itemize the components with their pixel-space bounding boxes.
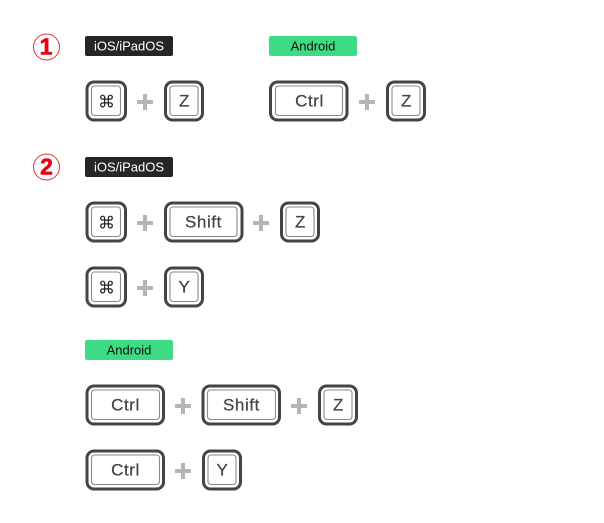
plus <box>137 280 153 296</box>
label: iOS/iPadOS (section 2): iOS/iPadOS <box>94 160 164 174</box>
key: Ctrl: Ctrl <box>111 396 140 414</box>
number badge 1: 1 <box>40 34 53 60</box>
key: command: ⌘ <box>98 92 115 112</box>
label: iOS/iPadOS (section 1): iOS/iPadOS <box>94 38 164 54</box>
key: Shift: Shift <box>223 396 260 414</box>
key: Shift <box>203 386 280 424</box>
key: Ctrl: Ctrl <box>111 460 140 480</box>
key: command <box>87 82 126 120</box>
key: Ctrl <box>87 451 164 489</box>
label: Android (section 2): Android <box>107 342 151 358</box>
number badge 2: 2 <box>40 154 53 180</box>
key: Z <box>388 82 424 120</box>
number badge 2 <box>34 154 60 180</box>
key: Y <box>204 451 240 489</box>
key: Z: Z <box>401 92 412 110</box>
key: Y <box>166 268 202 306</box>
key: Z <box>320 386 356 424</box>
plus <box>137 215 153 231</box>
plus <box>253 215 269 231</box>
key: Z: Z <box>295 212 306 232</box>
plus <box>359 94 375 110</box>
label: iOS/iPadOS (section 1) <box>85 36 173 56</box>
label: Android (section 1) <box>269 36 357 56</box>
plus <box>175 463 191 479</box>
key: Ctrl <box>270 82 347 120</box>
key: command <box>87 203 126 241</box>
label: iOS/iPadOS (section 2) <box>85 157 173 177</box>
key: Ctrl <box>87 386 164 424</box>
key: command <box>87 268 126 306</box>
key: Z: Z <box>179 92 190 110</box>
key: Z <box>166 82 202 120</box>
label: Android (section 2) <box>85 340 173 360</box>
label: Android (section 1): Android <box>291 38 335 54</box>
key: Shift <box>166 203 242 241</box>
plus <box>291 398 307 414</box>
key: Z <box>282 203 318 241</box>
plus <box>137 94 153 110</box>
key: Z: Z <box>333 396 344 414</box>
key: Y: Y <box>217 460 228 480</box>
key: command: ⌘ <box>98 214 115 234</box>
key: Shift: Shift <box>185 212 222 232</box>
plus <box>175 398 191 414</box>
number badge 1 <box>34 34 60 60</box>
key: command: ⌘ <box>98 278 115 298</box>
key: Ctrl: Ctrl <box>295 92 324 110</box>
key: Y: Y <box>179 278 190 296</box>
